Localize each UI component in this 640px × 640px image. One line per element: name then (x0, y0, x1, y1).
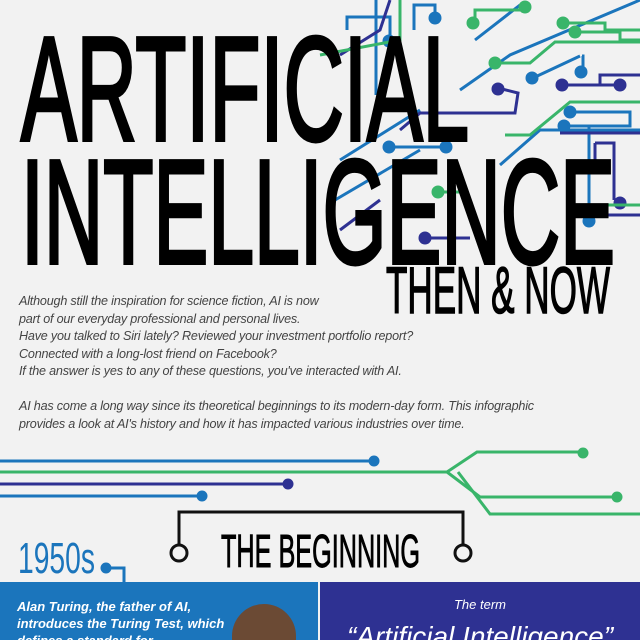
title (20, 7, 615, 327)
section heading: the beginning (170, 510, 472, 577)
panel: Alan Turing: Alan Turing, the father of AI, (17, 599, 191, 614)
panel: Alan Turing: introduces the Turing Test, which (17, 616, 224, 631)
panel: term Artificial Intelligence: The term (454, 597, 506, 612)
icon: Turing portrait (232, 604, 296, 640)
intro text: part of our everyday professional and personal lives. (19, 312, 300, 326)
intro text: Although still the inspiration for science fiction, AI is now (19, 294, 319, 308)
intro text: Connected with a long-lost friend on Facebook? (19, 346, 277, 360)
panel: term Artificial Intelligence (320, 582, 640, 640)
intro text: Have you talked to Siri lately? Reviewed your investment portfolio report? (19, 329, 413, 343)
panel: Alan Turing (0, 582, 318, 640)
intro paragraph 2: AI has come a long way since its theoretical beginnings to its modern-day form. This infographic (19, 399, 534, 413)
intro text: If the answer is yes to any of these questions, you've interacted with AI. (19, 364, 402, 378)
intro paragraph 2: provides a look at AI's history and how it has impacted various industries over time. (19, 416, 465, 430)
section heading: the beginning: THE BEGINNING (221, 525, 420, 577)
intro text (18, 294, 414, 378)
intro paragraph 2 (18, 399, 534, 430)
